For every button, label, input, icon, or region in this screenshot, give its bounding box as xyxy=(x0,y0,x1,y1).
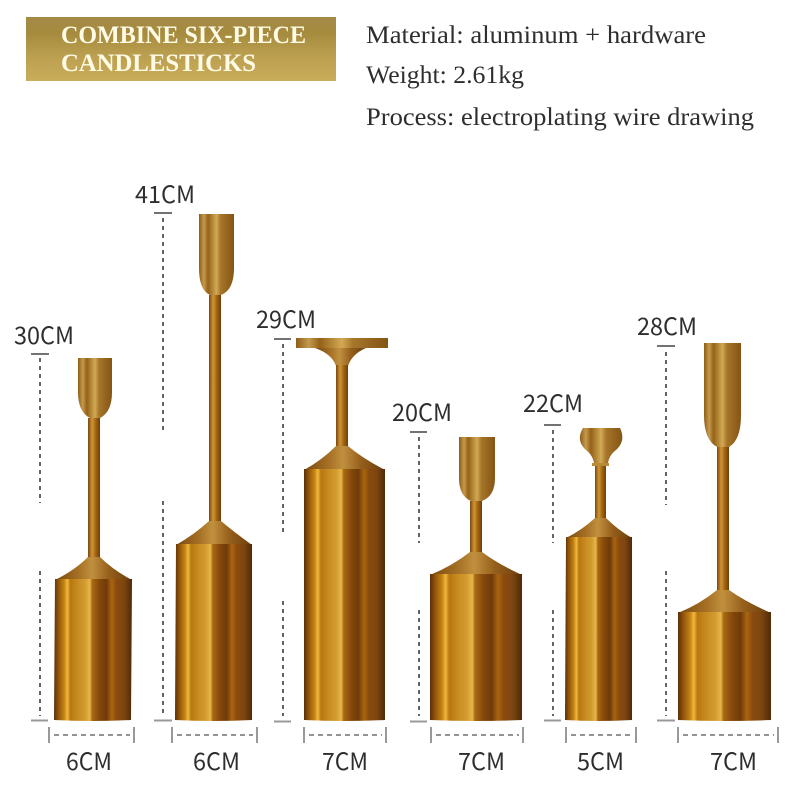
dimension: width 6cm xyxy=(49,727,134,777)
title banner xyxy=(26,17,336,81)
title banner: CANDLESTICKS xyxy=(61,50,256,77)
dimension: width 7cm: 7CM xyxy=(458,742,505,777)
candlestick 4: 20cm xyxy=(430,437,522,721)
candlestick 1: 30cm xyxy=(54,358,132,721)
dimension: width 7cm: 7CM xyxy=(322,742,368,777)
dimension: height 20cm: 20CM xyxy=(392,393,452,428)
title banner: COMBINE SIX-PIECE xyxy=(61,22,306,49)
specification text: Material: aluminum + hardware xyxy=(366,22,706,49)
dimension: height 41cm: 41CM xyxy=(135,175,195,210)
dimension: width 7cm xyxy=(678,727,778,777)
dimension: height 30cm: 30CM xyxy=(14,316,74,351)
dimension: width 7cm: 7CM xyxy=(710,742,757,777)
specification text: Weight: 2.61kg xyxy=(366,62,525,89)
candlestick 5: 22cm xyxy=(565,428,632,721)
dimension: width 7cm xyxy=(304,727,386,777)
dimension: width 7cm xyxy=(431,727,523,777)
candlestick 6: 28cm xyxy=(678,343,771,721)
dimension: height 29cm: 29CM xyxy=(256,300,316,335)
dimension: height 22cm: 22CM xyxy=(523,384,583,419)
specification text: Process: electroplating wire drawing xyxy=(366,104,755,131)
specification text xyxy=(366,22,755,131)
dimension: height 28cm: 28CM xyxy=(637,307,697,342)
dimension: width 5cm: 5CM xyxy=(577,742,624,777)
dimension: width 6cm xyxy=(172,727,257,777)
dimension: width 6cm: 6CM xyxy=(66,742,112,777)
candlestick 3: 29cm xyxy=(296,338,388,721)
dimension: width 5cm xyxy=(566,727,636,777)
candlestick 2: 41cm xyxy=(175,214,252,721)
dimension: width 6cm: 6CM xyxy=(193,742,240,777)
